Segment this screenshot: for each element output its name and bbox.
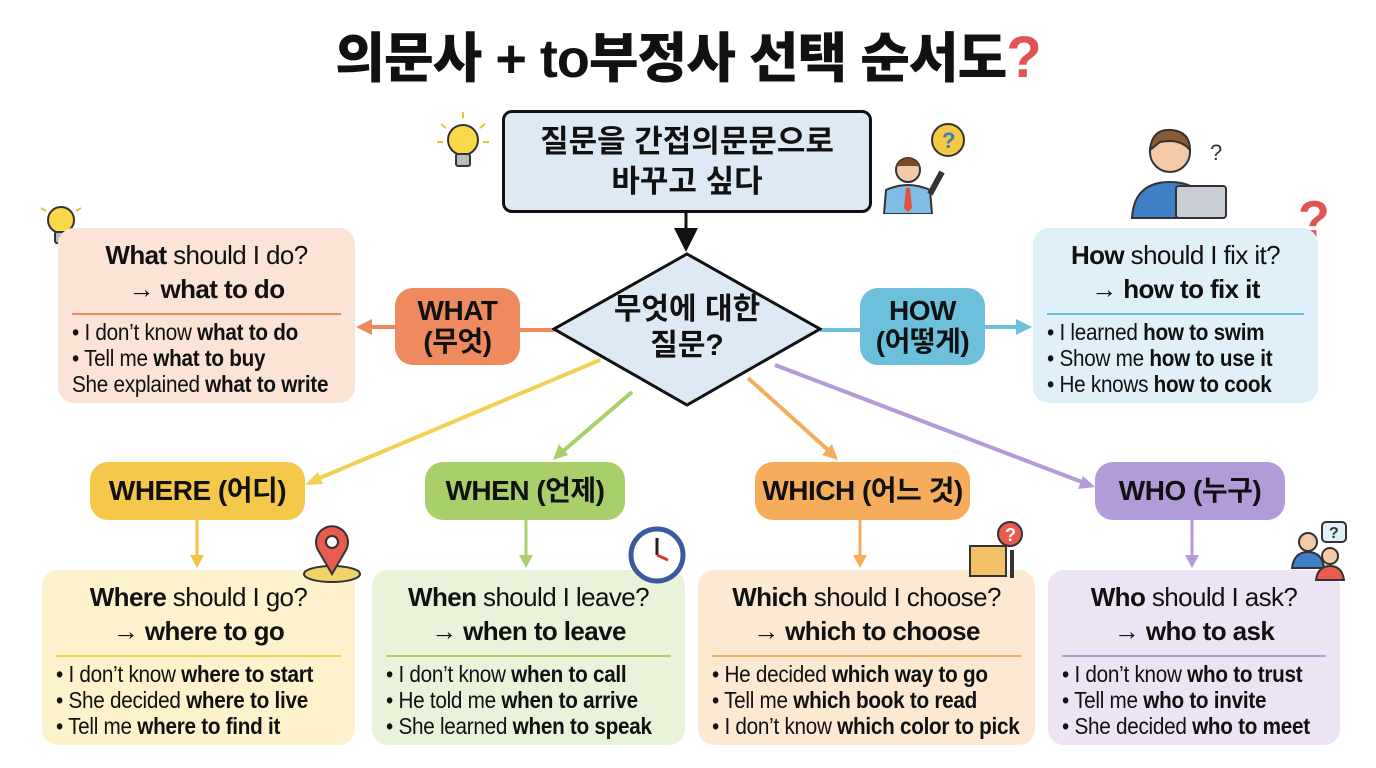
card: who: • I don’t know who to trust xyxy=(1062,661,1302,687)
card: who: • Tell me who to invite xyxy=(1062,687,1266,713)
card: what: → what to do xyxy=(128,274,284,304)
icon: lightbulb left xyxy=(40,206,82,244)
WHERE pill: WHERE (어디) xyxy=(109,475,286,506)
WHICH pill xyxy=(755,462,970,520)
card: which: • Tell me which book to read xyxy=(712,687,977,713)
card: which: • I don’t know which color to pick xyxy=(712,713,1020,739)
WHO pill: WHO (누구) xyxy=(1119,475,1261,506)
card: when: • He told me when to arrive xyxy=(386,687,638,713)
card: when: When should I leave? xyxy=(408,582,649,612)
top question box xyxy=(502,110,872,213)
title: 의문사 + to부정사 선택 순서도? xyxy=(335,25,1041,90)
icon: people with question xyxy=(1290,521,1347,581)
card: when xyxy=(372,570,685,745)
card: what: • I don’t know what to do xyxy=(72,319,298,345)
card: how: • I learned how to swim xyxy=(1047,319,1264,345)
card: where: • She decided where to live xyxy=(56,687,308,713)
card: when: → when to leave xyxy=(431,616,626,646)
card: where: • I don’t know where to start xyxy=(56,661,313,687)
card: when: • I don’t know when to call xyxy=(386,661,626,687)
icon: clock xyxy=(628,526,686,584)
card: who: Who should I ask? xyxy=(1091,582,1297,612)
WHICH pill: WHICH (어느 것) xyxy=(762,475,963,506)
WHEN pill: WHEN (언제) xyxy=(446,475,604,506)
WHEN pill xyxy=(425,462,625,520)
top question box: 바꾸고 싶다 xyxy=(611,164,763,198)
WHAT pill: (무엇) xyxy=(423,326,492,356)
card: what xyxy=(58,228,355,403)
decision diamond: 무엇에 대한 xyxy=(614,293,760,326)
card: where: Where should I go? xyxy=(90,582,307,612)
card: what: • Tell me what to buy xyxy=(72,345,265,371)
icon: book with question: ? xyxy=(1005,525,1016,545)
card: who xyxy=(1048,570,1340,745)
WHAT pill: WHAT xyxy=(418,295,497,326)
HOW pill: HOW xyxy=(889,295,956,326)
icon: person with laptop: ? xyxy=(1210,140,1222,165)
card: which: Which should I choose? xyxy=(732,582,1001,612)
decision diamond xyxy=(552,252,822,407)
card: which xyxy=(698,570,1035,745)
icon: man with question xyxy=(883,123,965,214)
icon: lightbulb top xyxy=(437,112,489,167)
card: how: • Show me how to use it xyxy=(1047,345,1272,371)
card: who: • She decided who to meet xyxy=(1062,713,1310,739)
card: which: → which to choose xyxy=(753,616,980,646)
icon: people with question: ? xyxy=(1329,525,1339,542)
top question box: 질문을 간접의문문으로 xyxy=(540,124,834,158)
card: how: • He knows how to cook xyxy=(1047,371,1271,397)
HOW pill xyxy=(860,288,985,365)
card: how: How should I fix it? xyxy=(1071,240,1280,270)
icon: location pin xyxy=(303,525,361,583)
decision diamond: 질문? xyxy=(650,329,724,362)
card: what: What should I do? xyxy=(105,240,308,270)
icon: person with laptop xyxy=(1130,128,1227,219)
card: which: • He decided which way to go xyxy=(712,661,988,687)
card: where: • Tell me where to find it xyxy=(56,713,280,739)
card: who: → who to ask xyxy=(1114,616,1274,646)
icon: book with question xyxy=(969,521,1023,578)
HOW pill: (어떻게) xyxy=(876,326,969,356)
WHERE pill xyxy=(90,462,305,520)
card: what: She explained what to write xyxy=(72,371,328,397)
icon: red question mark: ? xyxy=(1298,191,1330,249)
card: how: → how to fix it xyxy=(1091,274,1260,304)
WHAT pill xyxy=(395,288,520,365)
icon: man with question: ? xyxy=(942,128,955,153)
card: how xyxy=(1033,228,1318,403)
card: where xyxy=(42,570,355,745)
WHO pill xyxy=(1095,462,1285,520)
card: where: → where to go xyxy=(113,616,284,646)
card: when: • She learned when to speak xyxy=(386,713,652,739)
